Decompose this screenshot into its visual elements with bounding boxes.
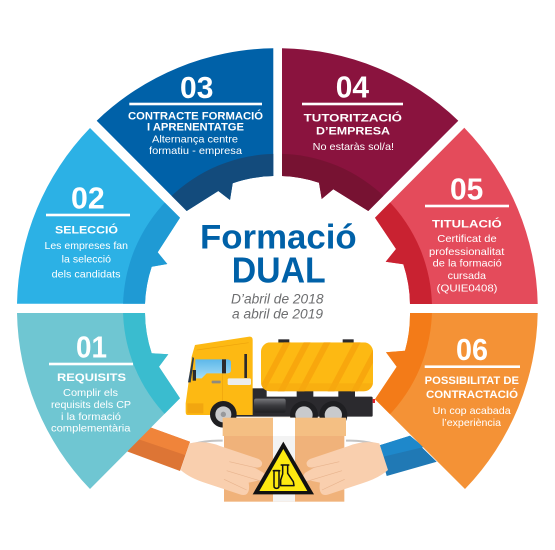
panel: 05 titulació: TITULACIÓ <box>432 218 502 231</box>
panel: 03 contracte: 03 <box>180 70 213 105</box>
subtitle: dates: D’abril de 2018 <box>231 291 324 306</box>
panel: 05 titulació: cursada <box>448 270 486 282</box>
panel: 01 requisits: complementària <box>51 423 131 435</box>
panel: 01 requisits <box>17 313 180 489</box>
panel: 06 contractació: l’experiència <box>442 417 501 429</box>
panel: 01 requisits: 01 <box>76 329 107 364</box>
panel: 06 contractació <box>375 313 538 489</box>
title: Formació <box>200 218 357 256</box>
panel: 02 selecció: 02 <box>71 180 105 215</box>
icon: tanker truck <box>186 337 382 429</box>
icon: right hand <box>303 441 388 495</box>
panel: 06 contractació: POSSIBILITAT DE <box>425 375 519 387</box>
panel: 01 requisits: REQUISITS <box>57 372 126 384</box>
panel: 03 contracte: I APRENENTATGE <box>147 122 244 134</box>
panel: 04 tutorització: D’EMPRESA <box>316 126 390 138</box>
subtitle: dates <box>231 291 324 322</box>
panel: 05 titulació: 05 <box>450 171 483 206</box>
panel: 03 contracte: formatiu - empresa <box>149 145 242 157</box>
panel: 03 contracte <box>96 48 274 211</box>
title <box>200 218 357 291</box>
panel: 01 requisits: requisits dels CP <box>51 399 131 411</box>
panel: 05 titulació: (QUIE0408) <box>437 283 498 295</box>
icon: right sleeve <box>378 436 437 476</box>
panel: 06 contractació: Un cop acabada <box>433 405 511 417</box>
panel: 06 contractació: 06 <box>456 332 488 367</box>
panel: 05 titulació: de la formació <box>433 258 502 270</box>
title: DUAL <box>232 250 326 291</box>
panel: 04 tutorització: 04 <box>336 70 370 105</box>
panel: 01 requisits: i la formació <box>61 411 121 423</box>
panel: 04 tutorització: No estaràs sol/a! <box>313 141 394 153</box>
panel: 01 requisits: Complir els <box>63 387 118 399</box>
panel: 02 selecció <box>17 128 180 304</box>
panel: 02 selecció: Les empreses fan <box>44 240 128 252</box>
panel: 06 contractació: CONTRACTACIÓ <box>426 388 518 401</box>
panel: 02 selecció: SELECCIÓ <box>55 224 118 237</box>
panel: 04 tutorització <box>282 48 458 211</box>
panel: 05 titulació: Certificat de <box>437 233 497 245</box>
panel: 05 titulació <box>375 128 538 304</box>
icon: cardboard box <box>223 418 346 502</box>
panel: 03 contracte: Alternança centre <box>152 134 238 146</box>
icon: left sleeve <box>110 420 190 471</box>
panel: 05 titulació: professionalitat <box>429 246 504 258</box>
panel: 03 contracte: CONTRACTE FORMACIÓ <box>128 109 263 122</box>
panel: 02 selecció: dels candidats <box>52 269 121 281</box>
panel: 04 tutorització: TUTORITZACIÓ <box>304 112 403 125</box>
icon: chemical hazard sign <box>253 442 314 494</box>
icon: left hand <box>181 441 265 495</box>
panel: 02 selecció: la selecció <box>62 254 111 266</box>
subtitle: dates: a abril de 2019 <box>232 307 323 322</box>
